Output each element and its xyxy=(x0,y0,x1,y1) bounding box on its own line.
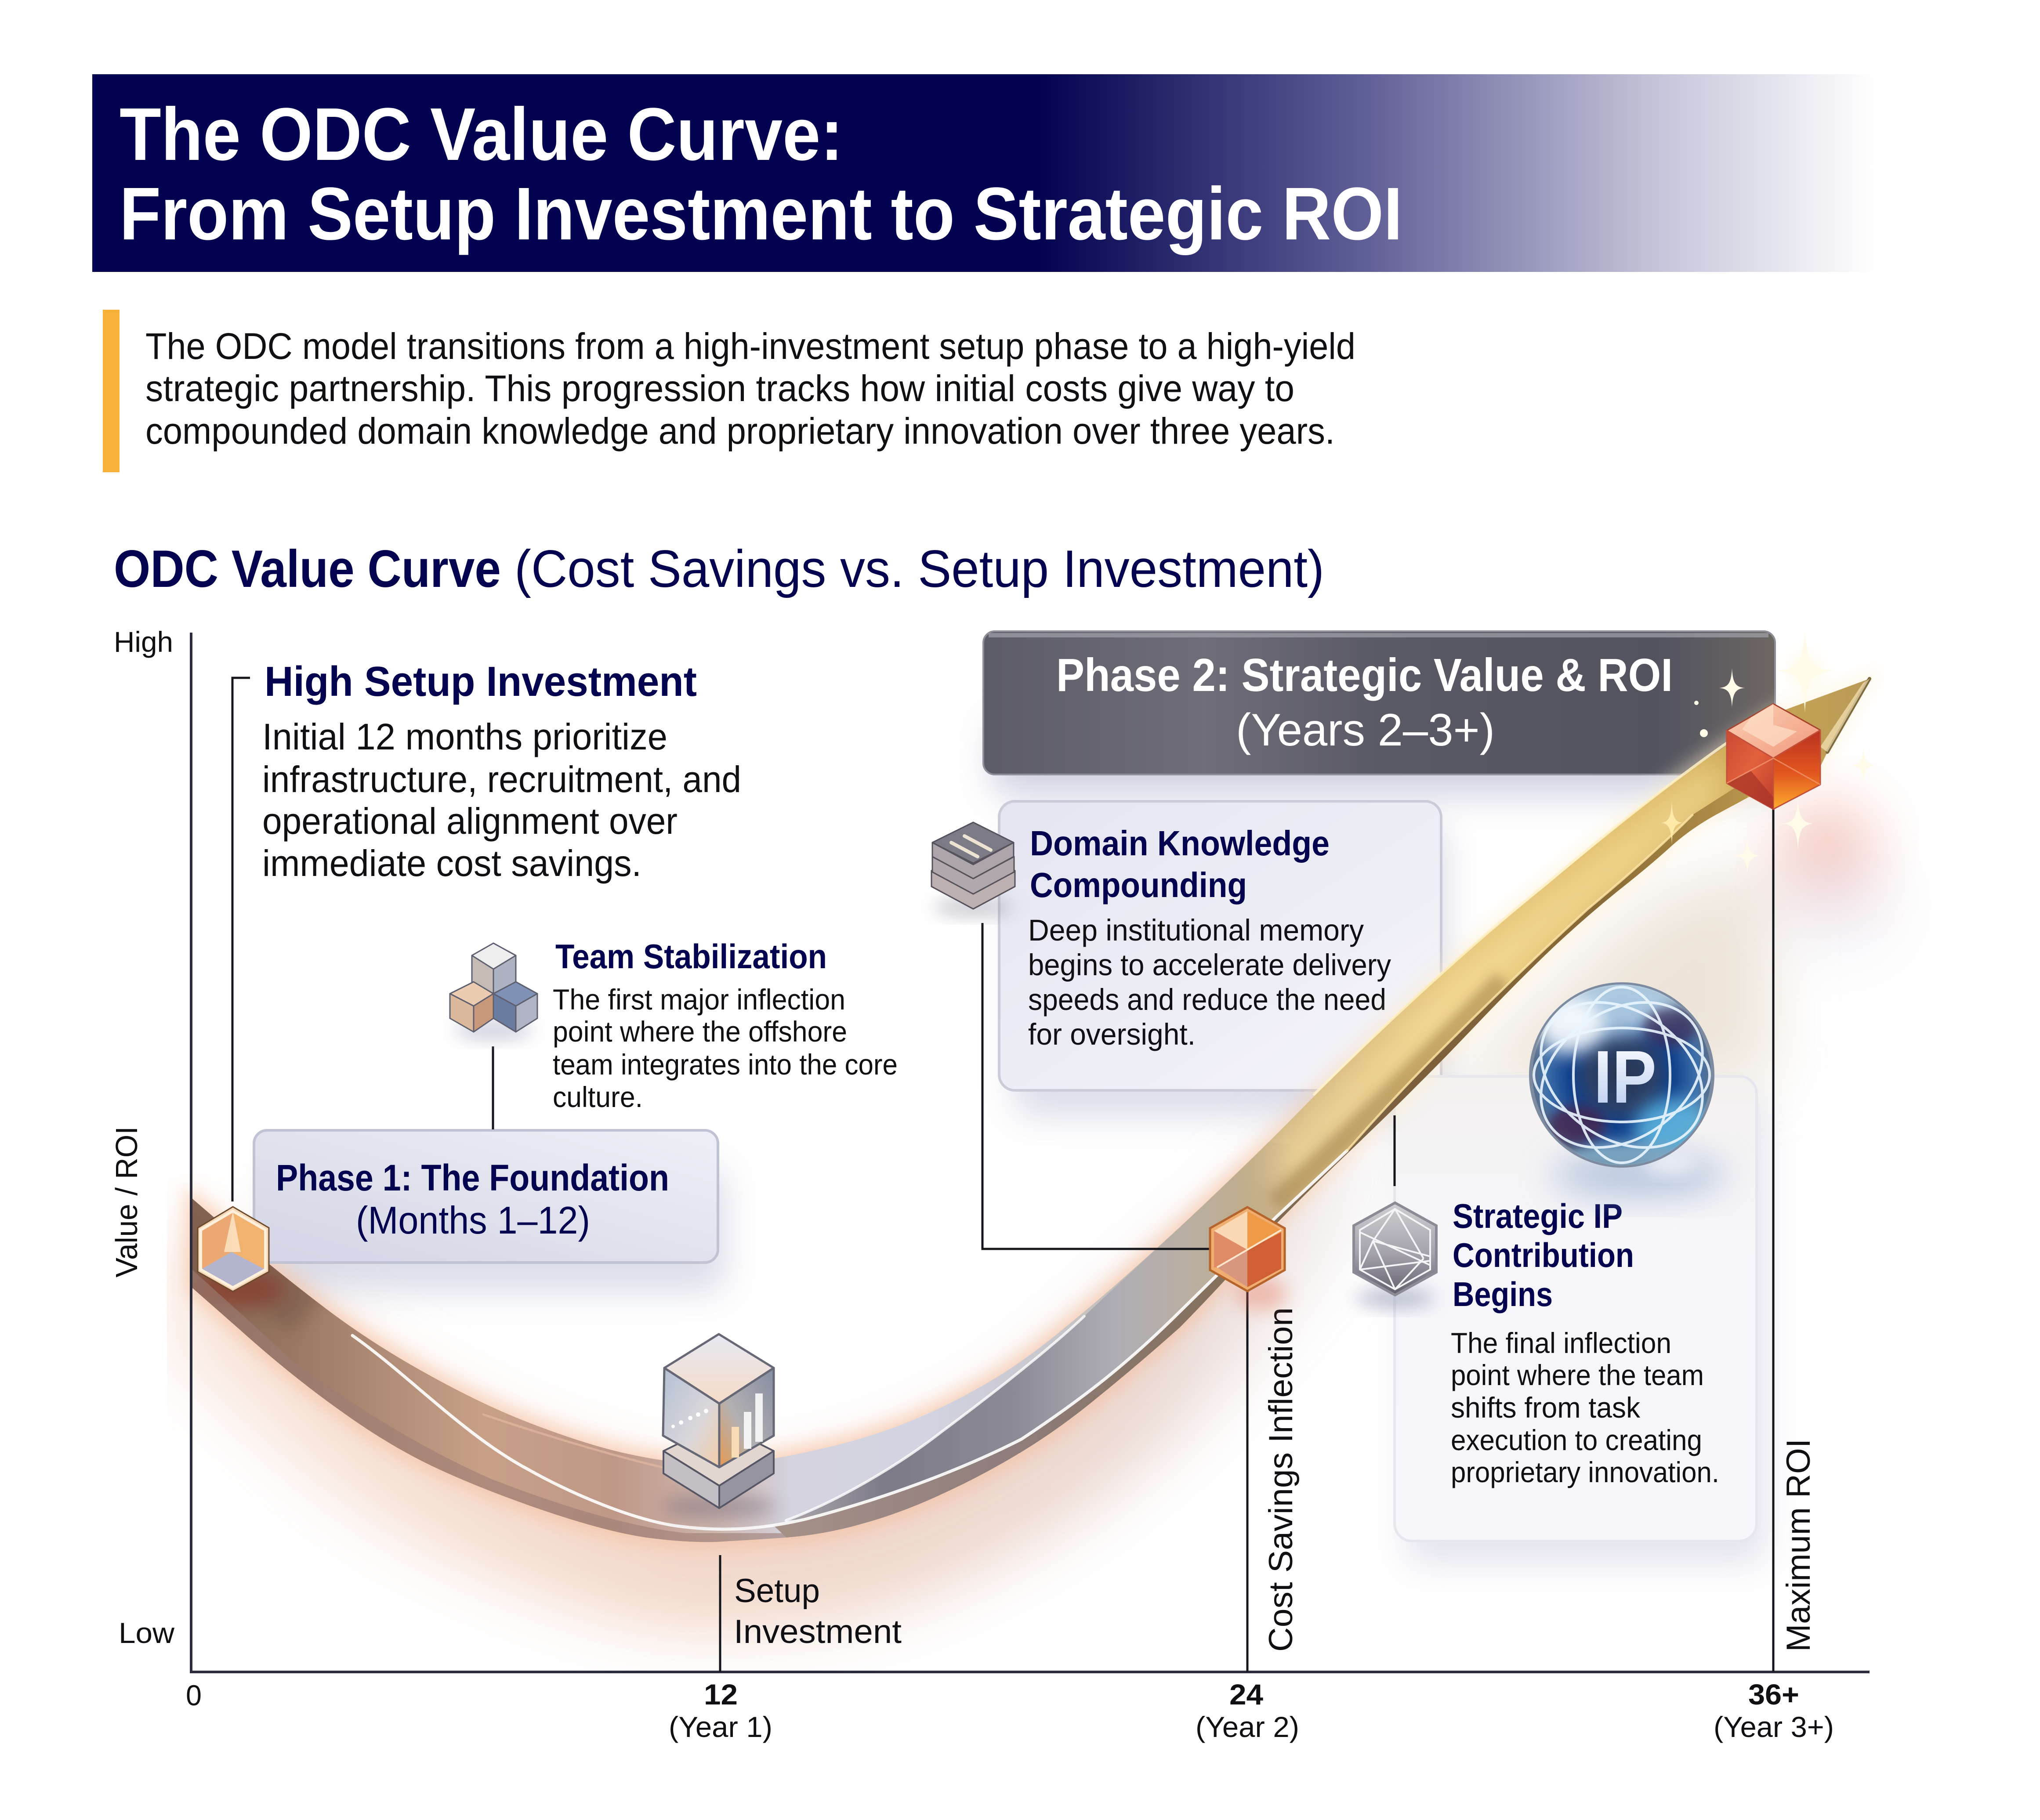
value curve ribbon xyxy=(191,679,1870,1542)
Strategic IP heading: Contribution xyxy=(1453,1236,1634,1274)
axis labels: Value / ROI xyxy=(109,1126,144,1277)
axis labels: Low xyxy=(119,1617,174,1649)
ribbon halo xyxy=(192,679,1870,1542)
panel: Phase 1 xyxy=(254,1130,718,1263)
Domain Knowledge heading: Compounding xyxy=(1030,865,1247,905)
icon: stacked layers xyxy=(931,822,1015,916)
chart heading xyxy=(114,539,1324,598)
icon: crystal chart cube xyxy=(662,1334,776,1518)
icon: IP globe xyxy=(1513,966,1730,1196)
Strategic IP body xyxy=(1451,1327,1719,1488)
axes xyxy=(190,633,1870,1672)
chart heading: (Cost Savings vs. Setup Investment) xyxy=(515,539,1324,598)
High Setup Investment body: immediate cost savings. xyxy=(262,843,641,884)
icon: team cubes xyxy=(450,943,537,1040)
title banner xyxy=(92,74,1876,272)
cube base xyxy=(663,1423,774,1508)
arrow tip shading xyxy=(1820,679,1870,752)
point labels: Cost Savings Inflection xyxy=(1262,1307,1300,1652)
chart bars xyxy=(671,1393,763,1458)
intro paragraph: The ODC model transitions from a high-investment setup phase to a high-yield xyxy=(145,326,1355,367)
High Setup Investment body: Initial 12 months prioritize xyxy=(262,716,667,757)
icon: hex node month 0 xyxy=(198,1207,269,1292)
point labels: Setup xyxy=(734,1572,820,1610)
intro accent bar xyxy=(103,310,120,472)
axis labels: 24 xyxy=(1229,1678,1263,1711)
lower dark strip xyxy=(773,780,1747,1538)
Domain Knowledge heading: Domain Knowledge xyxy=(1030,824,1330,863)
glow under inflection node xyxy=(1235,1276,1287,1311)
curve glow xyxy=(201,731,1894,1595)
title: The ODC Value Curve: xyxy=(120,93,843,176)
title xyxy=(120,93,1402,256)
Strategic IP body: point where the team xyxy=(1451,1359,1704,1391)
icon: red gem at maximum ROI xyxy=(1727,704,1820,809)
leader lines xyxy=(232,678,1773,1672)
High Setup Investment body xyxy=(262,716,741,884)
Phase 1 heading: Phase 1: The Foundation xyxy=(276,1157,669,1198)
intro paragraph xyxy=(145,326,1355,452)
axis labels: (Year 3+) xyxy=(1714,1711,1834,1743)
Phase 2 heading: (Years 2–3+) xyxy=(1236,705,1495,756)
Team Stabilization body xyxy=(553,983,898,1113)
axis labels: (Year 1) xyxy=(669,1711,772,1743)
axis labels: High xyxy=(114,626,173,658)
point labels: Investment xyxy=(734,1613,902,1650)
icon: hex wireframe IP gem xyxy=(1354,1203,1436,1308)
globe shading xyxy=(1525,966,1714,1168)
intro paragraph: strategic partnership. This progression tracks how initial costs give way to xyxy=(145,368,1294,409)
value curve chart xyxy=(109,626,1894,1743)
Domain Knowledge body xyxy=(1028,913,1391,1051)
icon: hex node cost savings inflection xyxy=(1210,1207,1285,1291)
lower left edge face xyxy=(192,1270,791,1542)
callout: Team Stabilization: Team Stabilization xyxy=(555,937,827,976)
Phase 2 heading: Phase 2: Strategic Value & ROI xyxy=(1056,649,1673,701)
chart heading: ODC Value Curve xyxy=(114,539,501,598)
Strategic IP body: execution to creating xyxy=(1451,1424,1702,1456)
axis labels: 0 xyxy=(186,1679,202,1711)
High Setup Investment body: infrastructure, recruitment, and xyxy=(262,759,741,800)
sparkles xyxy=(1661,629,1876,874)
axis labels: 36+ xyxy=(1748,1678,1799,1711)
Strategic IP heading: Begins xyxy=(1453,1275,1553,1313)
Phase 1 heading xyxy=(276,1157,669,1242)
Phase 1 heading: (Months 1–12) xyxy=(356,1198,590,1242)
Phase 2 heading xyxy=(1056,649,1673,756)
callout: High Setup Investment: High Setup Investment xyxy=(265,658,697,705)
Domain Knowledge body: for oversight. xyxy=(1028,1017,1196,1051)
Strategic IP heading xyxy=(1453,1197,1634,1313)
intro paragraph: compounded domain knowledge and proprietary innovation over three years. xyxy=(145,410,1335,452)
axis labels: (Year 2) xyxy=(1196,1711,1299,1743)
point labels xyxy=(734,1307,1817,1652)
Domain Knowledge body: Deep institutional memory xyxy=(1028,913,1364,947)
icon: IP globe: IP xyxy=(1594,1035,1656,1119)
callout: Team Stabilization xyxy=(553,937,898,1113)
Team Stabilization body: point where the offshore xyxy=(553,1015,847,1048)
Team Stabilization body: culture. xyxy=(553,1081,643,1113)
Strategic IP heading: Strategic IP xyxy=(1453,1197,1623,1235)
middle silver face xyxy=(786,1142,1347,1520)
ribbon highlights xyxy=(352,679,1870,1529)
panel: Domain Knowledge Compounding xyxy=(999,801,1441,1090)
panel: Strategic IP Contribution xyxy=(1395,1076,1757,1541)
Strategic IP body: The final inflection xyxy=(1451,1327,1671,1359)
Team Stabilization body: The first major inflection xyxy=(553,983,845,1016)
Team Stabilization body: team integrates into the core xyxy=(553,1048,898,1081)
panel: Phase 2 xyxy=(983,631,1775,774)
title: From Setup Investment to Strategic ROI xyxy=(120,172,1402,256)
High Setup Investment body: operational alignment over xyxy=(262,800,678,842)
callout: High Setup Investment xyxy=(262,658,741,884)
axis labels xyxy=(109,626,1834,1743)
Strategic IP body: shifts from task xyxy=(1451,1391,1641,1424)
axis labels: 12 xyxy=(704,1678,738,1711)
glass cube xyxy=(663,1334,774,1467)
Strategic IP body: proprietary innovation. xyxy=(1451,1456,1719,1488)
Domain Knowledge body: begins to accelerate delivery xyxy=(1028,948,1391,982)
Domain Knowledge body: speeds and reduce the need xyxy=(1028,983,1386,1017)
point labels: Maximum ROI xyxy=(1780,1439,1817,1652)
Domain Knowledge heading xyxy=(1030,824,1330,905)
panel shadows xyxy=(272,720,1775,1564)
gold sheen xyxy=(191,773,1722,1313)
